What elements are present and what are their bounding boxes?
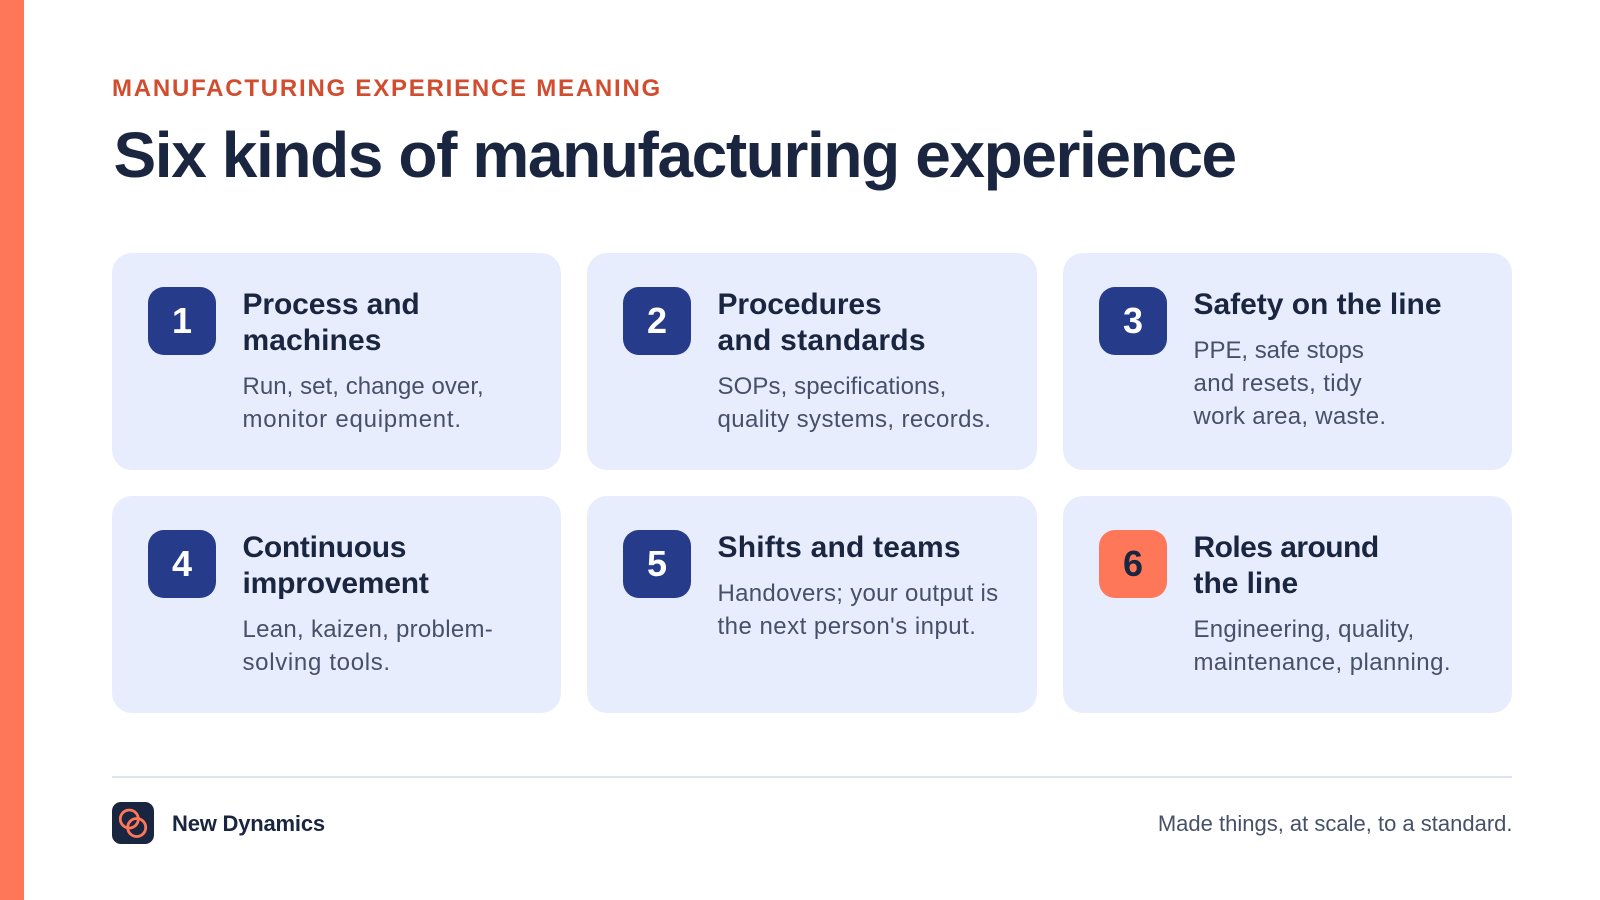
description 6 xyxy=(1194,616,1451,676)
heading 1: machines xyxy=(242,324,381,357)
card text 4 xyxy=(242,531,493,676)
description 3: work area, waste. xyxy=(1194,403,1386,430)
card text 3 xyxy=(1194,288,1442,430)
eyebrow: MANUFACTURING EXPERIENCE MEANING xyxy=(112,75,662,102)
heading 2: Procedures xyxy=(718,288,882,321)
description 2: quality systems, records. xyxy=(718,406,991,433)
badge 4: 4 xyxy=(172,543,192,584)
description 2: SOPs, specifications, xyxy=(718,373,946,400)
heading 6 xyxy=(1194,531,1379,600)
description 4: Lean, kaizen, problem- xyxy=(242,616,493,643)
card text 6 xyxy=(1194,531,1451,676)
badge 1: 1 xyxy=(172,300,192,341)
badge 6: 6 xyxy=(1123,543,1143,584)
description 5: the next person's input. xyxy=(718,613,976,640)
description 1: Run, set, change over, xyxy=(242,373,484,400)
description 4: solving tools. xyxy=(242,649,391,676)
card text 2 xyxy=(718,288,991,433)
heading 1 xyxy=(242,288,420,357)
heading 5: Shifts and teams xyxy=(718,531,961,564)
panel: continuous improvement xyxy=(112,496,561,713)
description 1: monitor equipment. xyxy=(242,406,462,433)
tagline: Made things, at scale, to a standard. xyxy=(1158,811,1512,836)
description 5 xyxy=(718,580,998,640)
panel: procedures and standards xyxy=(587,253,1037,470)
card text 5 xyxy=(718,531,998,640)
heading 4 xyxy=(242,531,429,600)
panel: process and machines xyxy=(112,253,561,470)
heading 6: the line xyxy=(1194,567,1298,600)
panel: shifts and teams xyxy=(587,496,1037,713)
heading 6: Roles around xyxy=(1194,531,1379,564)
heading 4: Continuous xyxy=(242,531,406,564)
description 2 xyxy=(718,373,991,433)
description 1 xyxy=(242,373,484,433)
heading 3: Safety on the line xyxy=(1194,288,1442,321)
description 3: and resets, tidy xyxy=(1194,370,1362,397)
badge 5 xyxy=(623,530,691,598)
card text 1 xyxy=(242,288,484,433)
badge 4 xyxy=(148,530,216,598)
description 3: PPE, safe stops xyxy=(1194,337,1364,364)
accent bar xyxy=(0,0,24,900)
brand name: New Dynamics xyxy=(172,811,325,836)
badge 5: 5 xyxy=(647,543,667,584)
badge 6 xyxy=(1099,530,1167,598)
description 6: Engineering, quality, xyxy=(1194,616,1414,643)
heading 2 xyxy=(718,288,926,357)
description 4 xyxy=(242,616,493,676)
heading 2: and standards xyxy=(718,324,926,357)
description 6: maintenance, planning. xyxy=(1194,649,1451,676)
badge 2: 2 xyxy=(647,300,667,341)
badge 2 xyxy=(623,287,691,355)
title: Six kinds of manufacturing experience xyxy=(114,119,1236,191)
panel: roles around the line xyxy=(1063,496,1512,713)
heading 4: improvement xyxy=(242,567,429,600)
badge 1 xyxy=(148,287,216,355)
badge 3: 3 xyxy=(1123,300,1143,341)
heading 1: Process and xyxy=(242,288,420,321)
icon: New Dynamics logo xyxy=(112,802,154,844)
panel: safety on the line xyxy=(1063,253,1512,470)
badge 3 xyxy=(1099,287,1167,355)
description 5: Handovers; your output is xyxy=(718,580,998,607)
description 3 xyxy=(1194,337,1386,430)
